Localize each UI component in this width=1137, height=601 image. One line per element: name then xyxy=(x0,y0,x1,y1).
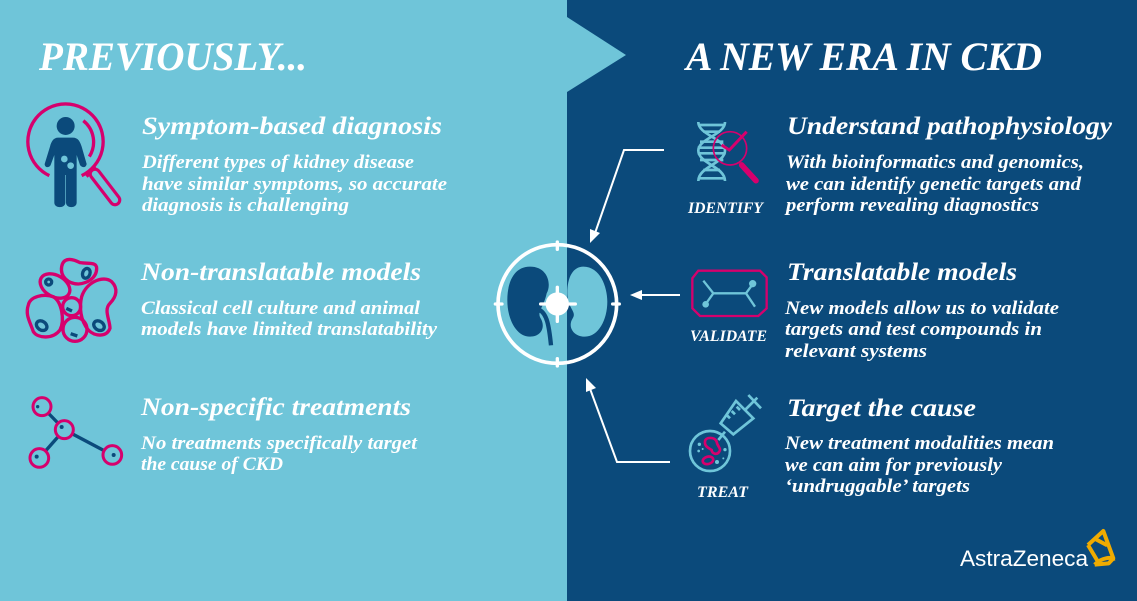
panel: previously background xyxy=(0,0,567,601)
heading: symptom-based diagnosis: Symptom-based diagnosis xyxy=(142,113,442,140)
text: understand pathophysiology description xyxy=(784,152,1084,216)
text: symptom-based diagnosis description: have similar symptoms, so accurate xyxy=(142,174,448,195)
text: non-translatable models description xyxy=(141,298,438,340)
text: non-specific treatments description: the cause of CKD xyxy=(141,454,283,475)
text: symptom-based diagnosis description: diagnosis is challenging xyxy=(142,195,349,216)
icon: network of nodes xyxy=(30,398,122,467)
title: previously: PREVIOUSLY... xyxy=(38,34,307,79)
icon: person under magnifier xyxy=(28,104,115,207)
heading: translatable models: Translatable models xyxy=(787,259,1017,286)
icon: cell cluster xyxy=(27,259,116,341)
text: symptom-based diagnosis description: Different types of kidney disease xyxy=(141,152,415,173)
text: target the cause description: ‘undruggable’ targets xyxy=(785,476,970,497)
text: non-specific treatments description xyxy=(140,433,418,475)
icon: translatable model octagon xyxy=(692,271,767,316)
icon: syringe and cell xyxy=(690,395,761,471)
text: non-translatable models description: Classical cell culture and animal xyxy=(141,298,421,319)
text: understand pathophysiology description: we can identify genetic targets and xyxy=(786,174,1082,195)
text: target the cause description: New treatment modalities mean xyxy=(784,433,1054,454)
text: translatable models description: relevant systems xyxy=(785,341,927,362)
title: a new era in CKD: A NEW ERA IN CKD xyxy=(683,34,1042,79)
heading: target the cause: Target the cause xyxy=(787,395,976,422)
heading: non-specific treatments: Non-specific treatments xyxy=(140,394,411,421)
label: validate: VALIDATE xyxy=(690,328,767,345)
panel: new era background xyxy=(567,0,1137,601)
logo: AstraZeneca: AstraZeneca xyxy=(960,546,1088,571)
label: treat: TREAT xyxy=(697,484,749,501)
icon: kidney target xyxy=(495,242,619,366)
heading: understand pathophysiology: Understand pathophysiology xyxy=(787,113,1113,140)
arrow notch between panels xyxy=(567,17,626,92)
arrow: identify to kidney xyxy=(590,150,664,243)
text: target the cause description xyxy=(784,433,1054,497)
text: symptom-based diagnosis description xyxy=(141,152,448,216)
text: non-specific treatments description: No treatments specifically target xyxy=(140,433,418,454)
logo: AstraZeneca xyxy=(960,531,1113,571)
icon: DNA with magnifier xyxy=(698,122,756,181)
arrow: validate to kidney xyxy=(630,290,680,300)
text: understand pathophysiology description: With bioinformatics and genomics, xyxy=(786,152,1084,173)
text: non-translatable models description: models have limited translatability xyxy=(141,319,438,340)
text: understand pathophysiology description: perform revealing diagnostics xyxy=(784,195,1039,216)
arrow: treat to kidney xyxy=(586,378,670,462)
label: identify: IDENTIFY xyxy=(687,200,764,217)
text: translatable models description xyxy=(784,298,1060,362)
text: translatable models description: targets and test compounds in xyxy=(785,319,1042,340)
heading: non-translatable models: Non-translatable models xyxy=(140,259,421,286)
text: translatable models description: New models allow us to validate xyxy=(784,298,1060,319)
text: target the cause description: we can aim for previously xyxy=(785,455,1003,476)
